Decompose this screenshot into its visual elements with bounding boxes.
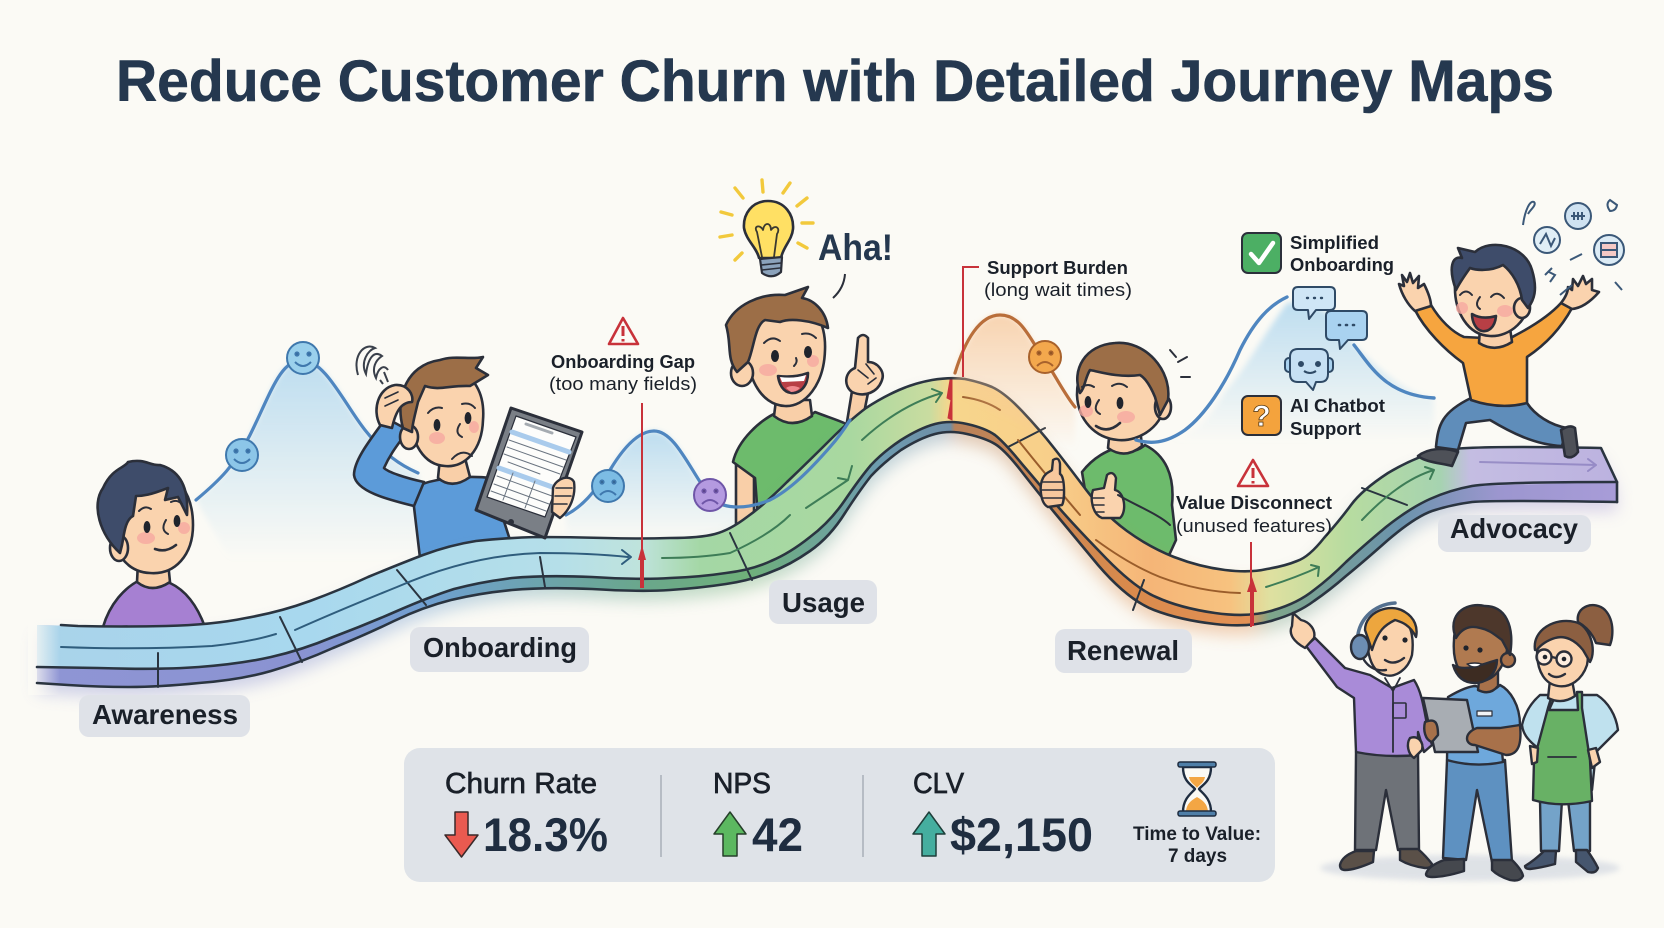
stage label: Onboarding: Onboarding: [423, 632, 577, 663]
callout: onboarding gap: Onboarding Gap: [551, 351, 695, 372]
stage label: Awareness: Awareness: [92, 699, 238, 730]
metric: churn rate: Churn Rate: [445, 768, 597, 800]
callout: value disconnect: [1176, 460, 1332, 627]
text: simplified onboarding: Onboarding: [1290, 254, 1394, 275]
callout: value disconnect: (unused features): [1176, 515, 1332, 536]
icon: question box: ?: [1252, 400, 1271, 433]
emotion curve: support burden hump: [955, 315, 1075, 450]
stage label: Onboarding: [410, 627, 589, 672]
callout: support burden: Support Burden: [987, 257, 1128, 278]
floating social icons: [1523, 200, 1624, 295]
stage label: Renewal: Renewal: [1067, 635, 1179, 666]
metric: NPS: [713, 768, 803, 861]
metric: NPS: 42: [752, 808, 803, 861]
icon: happy face low: [226, 439, 258, 471]
callout: onboarding gap: (too many fields): [549, 373, 697, 394]
stage label: Advocacy: Advocacy: [1450, 513, 1578, 544]
metric: CLV: $2,150: [950, 808, 1093, 861]
icon: sad face blue: [592, 470, 624, 502]
team group: [1291, 603, 1620, 881]
icon: frown face orange: [1029, 341, 1061, 373]
icon: question box: [1242, 396, 1281, 435]
icon: hourglass: [1178, 762, 1216, 816]
stage label: Renewal: [1055, 629, 1192, 673]
road outlines and lanes: [37, 378, 1617, 687]
metric: NPS: NPS: [713, 768, 771, 800]
text: simplified onboarding: Simplified: [1290, 232, 1379, 253]
icon: chat bubble two: [1326, 311, 1367, 349]
person: support agent: [1291, 603, 1432, 870]
callout: onboarding gap: [549, 318, 697, 588]
stage label: Usage: [769, 580, 877, 624]
character: renewal customer body: [1077, 343, 1190, 575]
icon: happy face peak: [287, 342, 319, 374]
stage label: Usage: Usage: [782, 587, 865, 618]
stage label: Awareness: [79, 695, 250, 737]
journey road: [28, 378, 1617, 697]
metric: CLV: CLV: [913, 768, 965, 800]
emotion curve: recovery hump: [1136, 297, 1434, 442]
callout: support burden: (long wait times): [984, 279, 1132, 300]
character: advocacy customer: [1399, 245, 1599, 466]
metrics panel: [404, 748, 1275, 882]
metric: churn rate: 18.3%: [483, 808, 608, 861]
icon: warning triangle: [609, 318, 638, 344]
ground shadow: [1320, 855, 1620, 881]
text: ai chatbot support: Support: [1290, 418, 1361, 439]
metric: churn rate: [445, 768, 608, 861]
character: confused customer with tablet body: [354, 357, 510, 558]
metric: time to value: 7 days: [1168, 846, 1227, 867]
emotion curve: onboarding dip: [566, 431, 770, 540]
emotion curve tail over shirt: [709, 420, 850, 507]
character: aha customer: [726, 287, 883, 545]
metric: time to value: Time to Value:: [1133, 824, 1261, 845]
icon: chatbot: [1285, 349, 1333, 390]
person: shop staff with apron: [1522, 605, 1618, 872]
metric: CLV: [913, 768, 1093, 861]
character: awareness customer: [98, 461, 205, 627]
callout: support burden: [947, 257, 1132, 420]
person: store associate with tablet: [1423, 605, 1523, 880]
callout: value disconnect: Value Disconnect: [1176, 492, 1332, 513]
icon: chat bubble one: [1293, 287, 1335, 319]
icon: sad face purple: [694, 479, 726, 511]
stage label: Advocacy: [1438, 513, 1591, 552]
icon: lightbulb: [720, 180, 813, 276]
title: Reduce Customer Churn with Detailed Journey Maps: [116, 49, 1554, 114]
thumbs up hands: [1041, 459, 1170, 525]
icon: confused scribble: [356, 347, 388, 384]
road shadow: [37, 388, 1617, 697]
speech tick: [833, 274, 845, 298]
icon: warning triangle: [1238, 460, 1268, 486]
road side face: [37, 378, 1617, 687]
icon: check box: [1242, 233, 1281, 273]
tablet with form: [476, 408, 582, 538]
text: Aha!: Aha!: [818, 227, 893, 268]
road top face: [37, 378, 1617, 669]
text: ai chatbot support: AI Chatbot: [1290, 395, 1385, 416]
emotion curve: early high and dip: [196, 342, 420, 560]
